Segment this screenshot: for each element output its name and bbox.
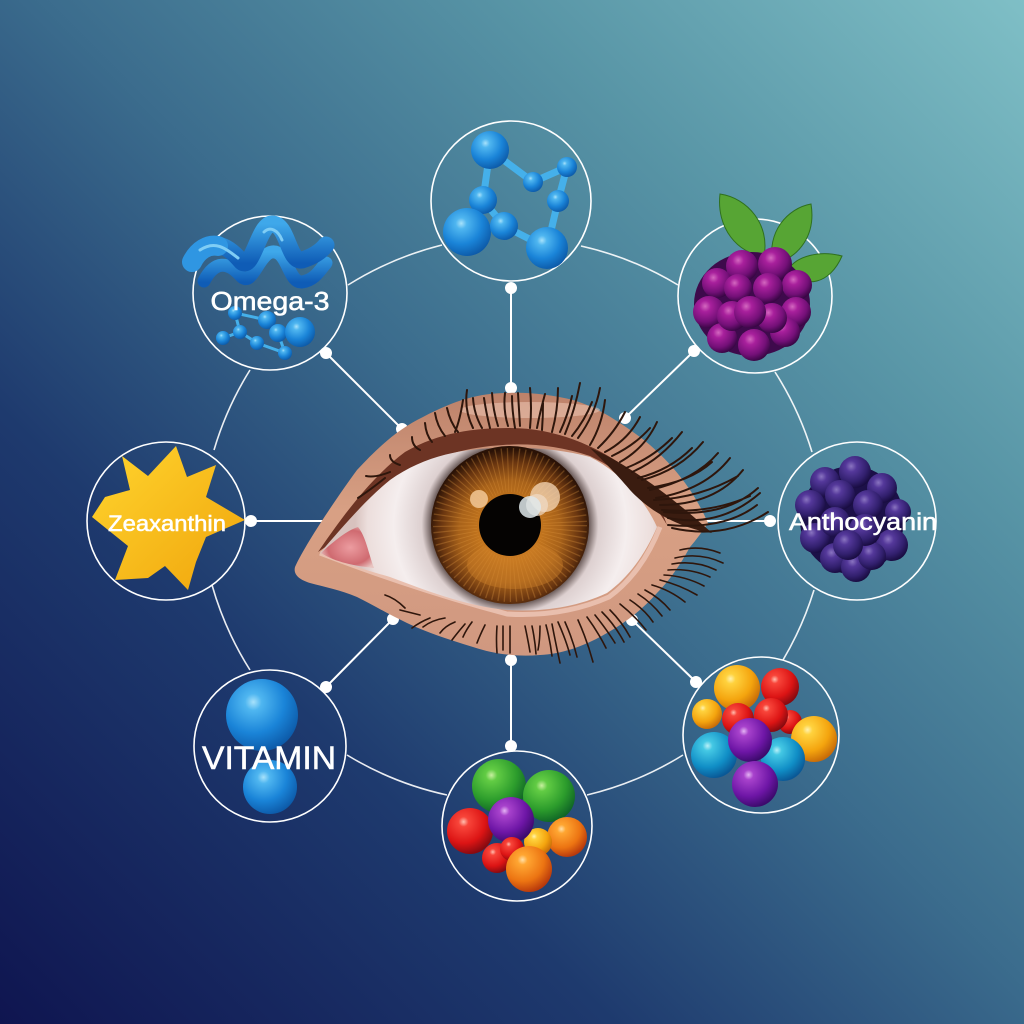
panel: colourful spheres right <box>683 657 839 813</box>
caruncle <box>321 527 374 568</box>
lash base right <box>590 448 712 533</box>
upper lid crease <box>318 428 667 552</box>
connector ring <box>212 245 814 795</box>
lower lid rim <box>320 527 660 614</box>
label: Omega-3: Omega-3 <box>210 286 330 316</box>
panel: colourful spheres bottom <box>442 751 592 901</box>
upper lashes <box>358 383 768 532</box>
central eye <box>295 383 768 663</box>
label: Zeaxanthin: Zeaxanthin <box>108 511 226 536</box>
panel: vitamin <box>194 670 346 822</box>
icon: dark berries <box>800 466 904 574</box>
label: Anthocyanin: Anthocyanin <box>789 509 937 536</box>
panel: top molecule <box>431 121 591 281</box>
icon: small molecule <box>216 306 315 360</box>
lower lashes <box>385 548 723 663</box>
icon: leaves <box>720 194 842 282</box>
connector spokes <box>246 283 775 751</box>
panel: zeaxanthin <box>87 442 245 600</box>
lid shine <box>460 402 600 418</box>
panel: omega-3 <box>192 216 347 370</box>
label: VITAMIN: VITAMIN <box>202 740 336 776</box>
panel: berry <box>678 194 842 373</box>
panel: anthocyanin <box>778 442 937 600</box>
sclera <box>320 448 657 610</box>
pupil <box>479 494 541 556</box>
icon: yellow star <box>92 446 245 590</box>
icon: berries <box>694 252 810 356</box>
icon: omega-3 waves <box>192 224 326 282</box>
eyelid skin <box>295 393 708 656</box>
highlights <box>530 482 560 512</box>
iris fibres <box>455 470 565 580</box>
iris <box>431 446 589 604</box>
